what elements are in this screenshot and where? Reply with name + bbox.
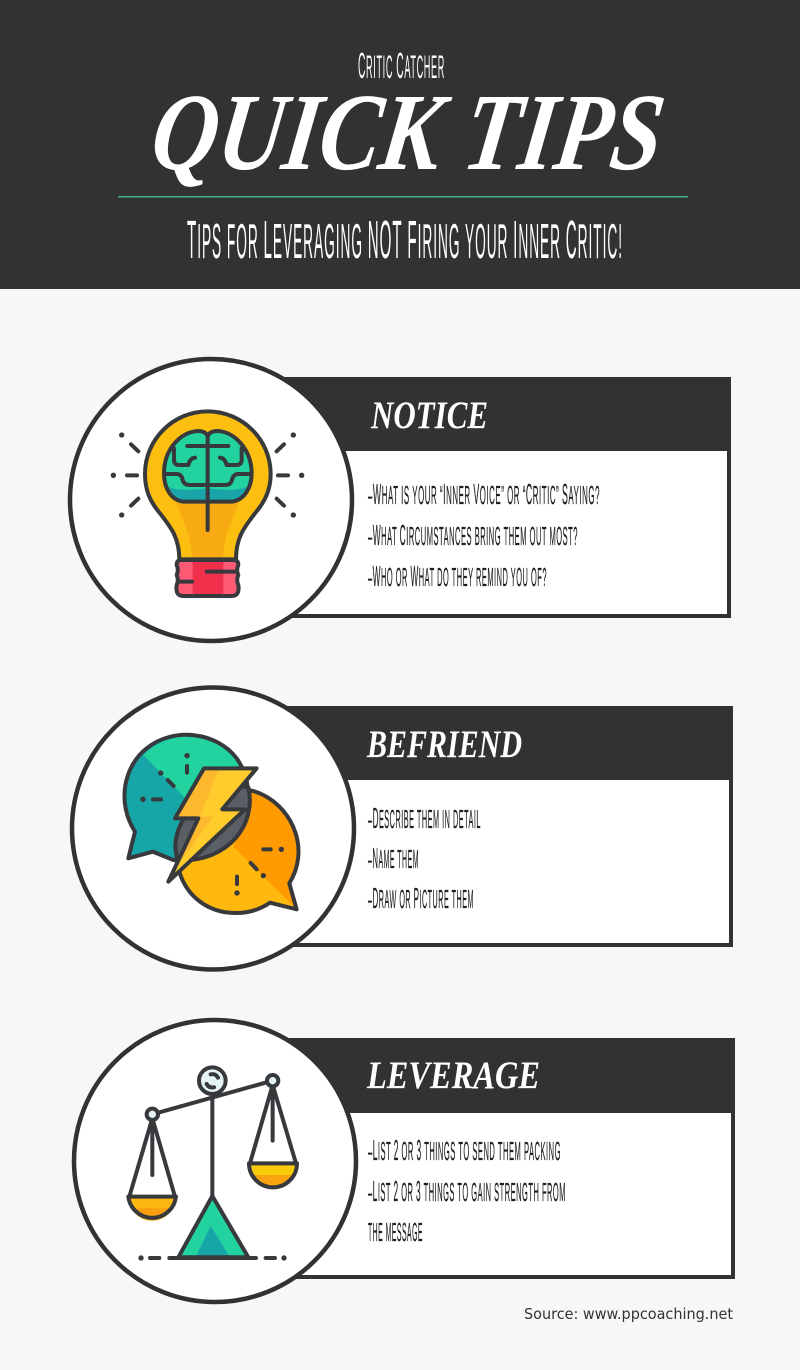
source credit: Source: www.ppcoaching.net — [524, 1305, 733, 1323]
panel: befriend — [72, 688, 733, 970]
icon: speech bubbles with lightning bolt — [124, 735, 299, 913]
panel: befriend: –DRAW OR PICTURE THEM — [368, 883, 474, 915]
text block: notice questions — [368, 479, 600, 593]
icon: light bulb with brain — [113, 411, 302, 596]
text block: leverage steps — [368, 1135, 566, 1247]
text block: befriend steps: –NAME THEM — [368, 843, 419, 875]
panel: notice — [70, 359, 731, 641]
subtitle: TIPS FOR LEVERAGING NOT FIRING YOUR INNER CRITIC! — [187, 210, 623, 270]
icon: balance scale — [128, 1067, 297, 1258]
panel: befriend: –DESCRIBE THEM IN DETAIL — [368, 803, 481, 835]
text block: befriend steps — [368, 803, 481, 915]
heading: befriend: BEFRIEND — [366, 723, 522, 766]
text block: notice questions: –WHAT IS YOUR “INNER VOICE” OR “CRITIC” SAYING? — [368, 479, 600, 511]
text block: leverage steps: THE MESSAGE — [368, 1217, 423, 1247]
header band — [0, 0, 800, 289]
heading: leverage: LEVERAGE — [366, 1054, 540, 1097]
header band: CRITIC CATCHER — [358, 45, 445, 86]
heading: notice: NOTICE — [370, 394, 488, 437]
title: QUICK TIPS — [145, 70, 672, 193]
panel: leverage — [74, 1020, 735, 1302]
